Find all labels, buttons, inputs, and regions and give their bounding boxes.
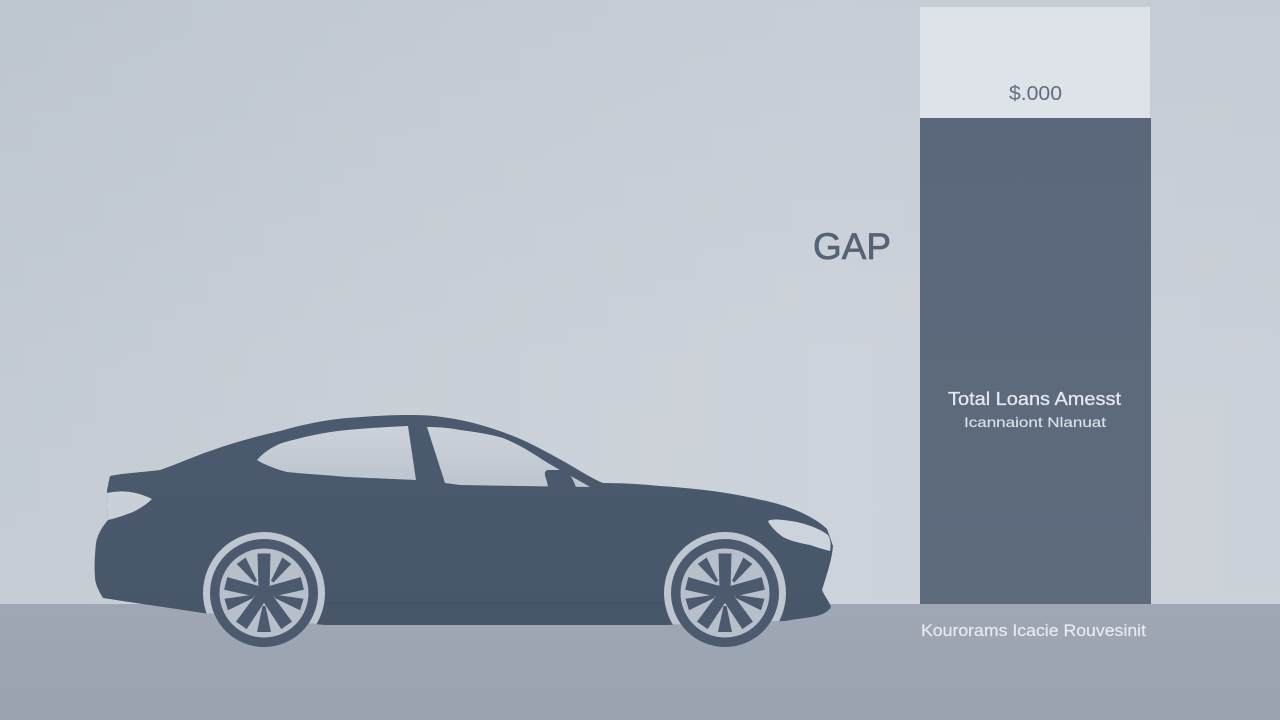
front side window [427,427,590,487]
GAP label: GAP [813,226,891,267]
rear wheel arch ring [203,532,325,624]
rear wheel [210,539,318,647]
side mirror [545,470,576,488]
caption below bar: Kourorams Icacie Rouvesinit [921,621,1146,640]
loan segment of bar [920,118,1151,604]
floor [0,604,1280,720]
rear side window [257,426,416,480]
gap segment of bar [920,7,1150,118]
headlight [768,519,831,551]
front wheel arch ring [664,532,786,625]
car body [95,415,833,625]
front wheel [671,539,779,647]
sill line [325,602,665,604]
tail light [107,491,152,520]
car illustration [95,415,833,654]
loan label: Total Loans Amesst [948,389,1121,409]
gap amount: $.000 [1009,83,1062,105]
loan sublabel: Icannaiont Nlanuat [964,414,1106,430]
